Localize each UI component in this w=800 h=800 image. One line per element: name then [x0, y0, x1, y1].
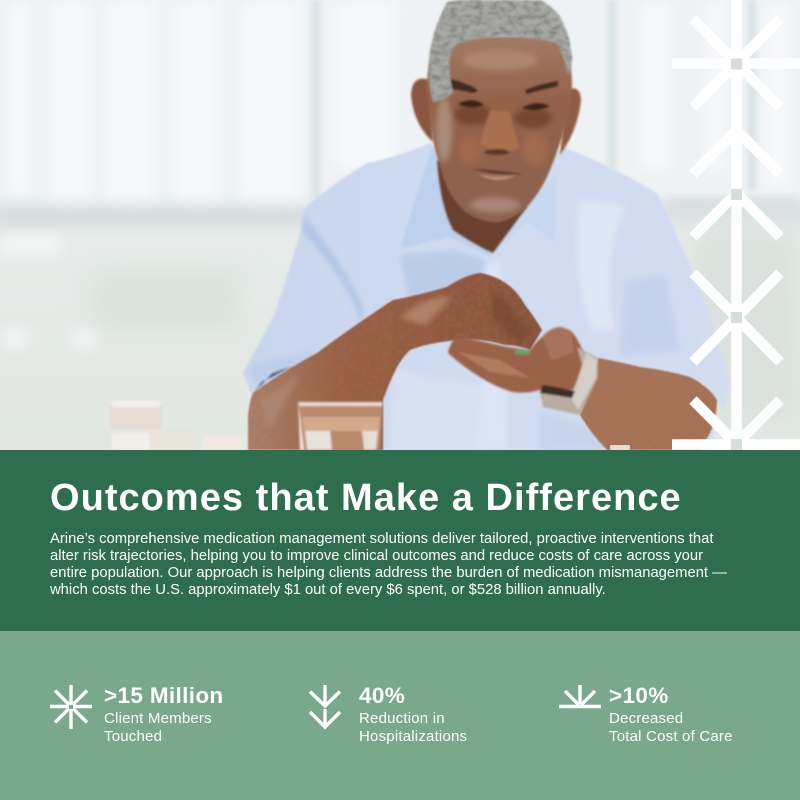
body text: Arine’s comprehensive medication management solutions deliver tailored, proactive interventions that: [50, 531, 713, 547]
stat: total cost of care: [559, 683, 733, 744]
body text: entire population. Our approach is helping clients address the burden of medication mismanagement —: [50, 565, 727, 581]
man: right forearm: [580, 358, 717, 450]
icon: double down arrow: [308, 685, 342, 729]
stat label: [104, 710, 212, 744]
stat label: Hospitalizations: [359, 728, 467, 744]
stat label: Total Cost of Care: [609, 728, 733, 744]
man: facial features: [436, 50, 558, 213]
icon: half burst: [559, 685, 601, 708]
body text: [50, 531, 727, 598]
stat value: >10%: [609, 683, 669, 708]
man: cupped hand holding pills: [448, 327, 585, 393]
man: ears: [411, 79, 581, 155]
shirt collar: [400, 147, 495, 257]
pattern: white geometric bars: [672, 0, 800, 450]
stat label: Touched: [104, 728, 162, 744]
panel: statistics: [0, 631, 800, 800]
small pill at table edge: [610, 445, 630, 450]
background: blurred window curtains: [0, 0, 800, 450]
glass of water: [298, 402, 383, 450]
pill bottles: [110, 401, 244, 450]
panel: intro: [0, 450, 800, 631]
icon: star burst: [50, 685, 92, 729]
stat label: Reduction in: [359, 710, 445, 727]
wristwatch: [540, 347, 598, 415]
man: face: [427, 36, 572, 222]
man: shirt: [243, 143, 730, 450]
heading: Outcomes that Make a Difference: [50, 477, 682, 519]
stat: client members: [50, 683, 224, 744]
stat label: Client Members: [104, 710, 212, 727]
stat label: [359, 710, 467, 744]
man: gray hair: [429, 0, 572, 102]
body text: alter risk trajectories, helping you to improve clinical outcomes and reduce costs of care across your: [50, 548, 703, 564]
man: left forearm and pinching hand: [248, 273, 542, 450]
stat label: [609, 710, 733, 744]
photo: man taking pills at a table with geometric pattern: [0, 0, 800, 450]
body text: which costs the U.S. approximately $1 out of every $6 spent, or $528 billion annually.: [50, 582, 606, 598]
stat value: >15 Million: [104, 683, 224, 708]
stat label: Decreased: [609, 710, 683, 727]
man: neck: [437, 160, 527, 253]
stat value: 40%: [359, 683, 405, 708]
stat: hospitalizations: [308, 683, 467, 744]
